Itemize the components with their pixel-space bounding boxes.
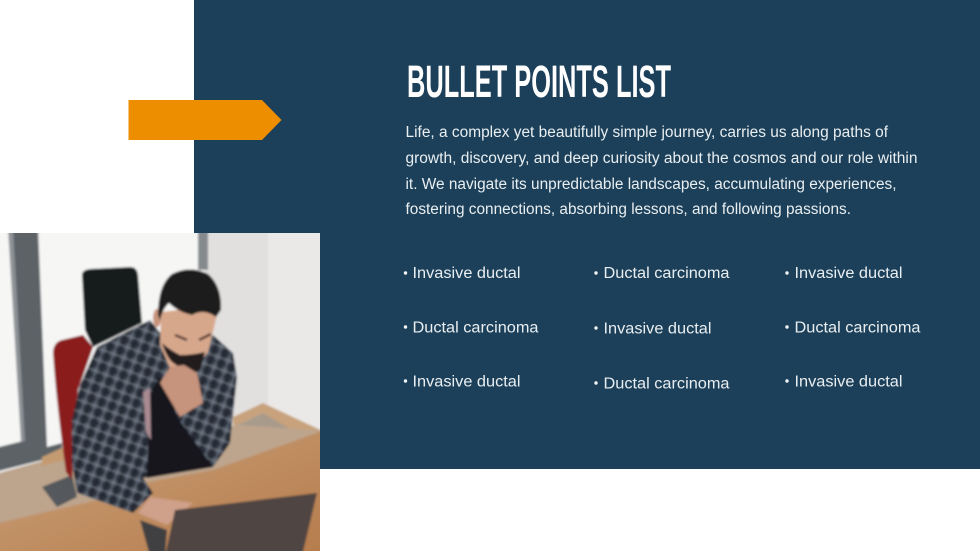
- bullet column 1 row 3: Invasive ductal: [412, 374, 520, 390]
- window sill: [42, 447, 64, 466]
- bullet column 2 row 1: Ductal carcinoma: [604, 265, 730, 282]
- chair red: [53, 335, 93, 480]
- photo right edge: [320, 233, 321, 469]
- bullet column 1 row 2: Ductal carcinoma: [412, 320, 539, 336]
- chair base: [42, 475, 77, 507]
- text block: intro paragraph: it. We navigate its unpredictable landscapes, accumulating experiences,: [406, 176, 896, 193]
- photo: man at laptop: [0, 228, 325, 551]
- text block: intro paragraph: fostering connections, absorbing lessons, and following passions.: [406, 201, 851, 218]
- bullet list: [404, 265, 921, 392]
- window frame: [0, 228, 62, 472]
- desk: [0, 430, 325, 551]
- floor: [0, 425, 320, 524]
- skirting: [231, 402, 320, 432]
- t-shirt: [147, 377, 213, 478]
- hand on chin: [160, 365, 203, 417]
- panel: navy background: [194, 0, 980, 469]
- bullet column 3 row 2: Ductal carcinoma: [794, 320, 921, 336]
- ear: [153, 309, 161, 327]
- bullet column 1 row 1: Invasive ductal: [412, 265, 520, 282]
- text block: intro paragraph: growth, discovery, and deep curiosity about the cosmos and our role within: [406, 150, 918, 167]
- beard: [162, 343, 205, 375]
- chair back: [82, 267, 142, 347]
- keyboard: [140, 520, 167, 551]
- bullet column 3 row 3: Invasive ductal: [794, 374, 902, 390]
- sleeve: [180, 403, 232, 467]
- bullet column 2 row 3: Ductal carcinoma: [604, 376, 730, 392]
- bullet column 2 row 2: Invasive ductal: [604, 320, 712, 338]
- typing hand: [138, 497, 193, 525]
- text block: intro paragraph: Life, a complex yet beautifully simple journey, carries us along paths of: [406, 124, 889, 141]
- arrow: orange pointer: [128, 100, 282, 140]
- laptop: [165, 493, 317, 551]
- inner collar: [143, 388, 151, 440]
- neck and face: [160, 308, 217, 375]
- text block: intro paragraph: [406, 124, 918, 218]
- shirt: [72, 320, 237, 513]
- bullet column 3 row 1: Invasive ductal: [794, 265, 902, 282]
- eyes and brows: [175, 334, 211, 340]
- title: BULLET POINTS LIST: [407, 56, 671, 107]
- hair: [158, 270, 221, 320]
